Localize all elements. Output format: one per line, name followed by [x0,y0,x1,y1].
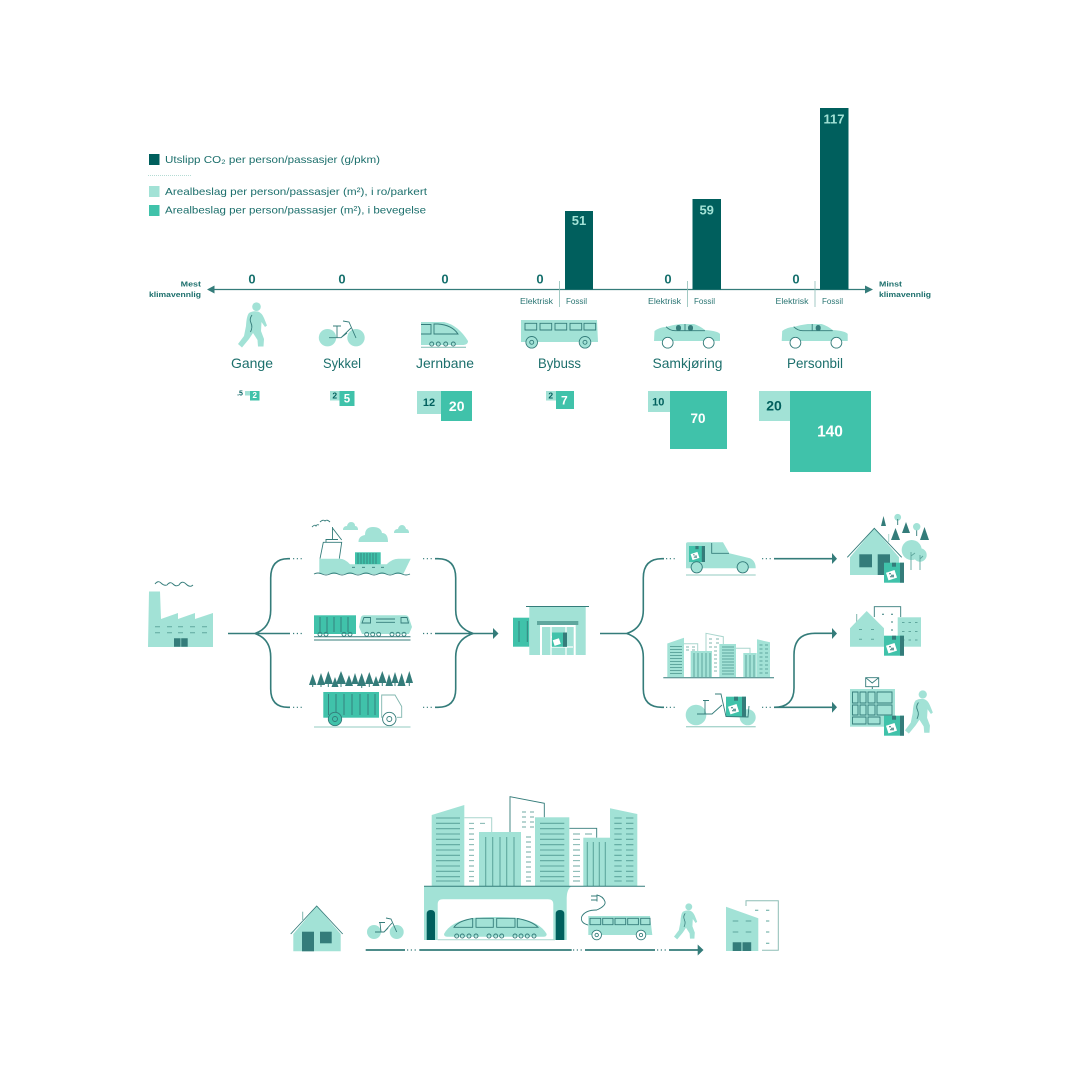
transport mode names: Bybuss [538,355,581,371]
transport mode names [231,355,843,371]
icon: private car [782,324,848,348]
icon: factory [148,582,213,647]
zero emission values: 0 [441,272,449,286]
icon: freight train [314,615,412,640]
axis label: most friendly: klimavennlig [149,290,201,299]
legend: Utslipp CO₂ per person/passasjer (g/pkm) [165,154,380,166]
area squares: car: 140 [817,424,843,440]
zero emission values: 0 [536,272,544,286]
area squares: bicycle: 2 [332,390,337,400]
panel: freight logistics flow [148,514,933,736]
electric / fossil sublabels: Elektrisk [648,297,682,306]
area squares: walking [237,391,260,400]
emission bar: bus fossil 51: 51 [572,213,586,228]
icon: timber truck [314,692,410,727]
area squares: car: 20 [766,398,782,414]
area squares: rail [417,391,472,421]
area squares: rail: 20 [449,398,465,414]
electric / fossil sublabels: Elektrisk [520,297,554,306]
legend [148,154,427,216]
transport mode names: Gange [231,355,273,371]
axis arrow: most to least climate friendly [207,286,873,294]
area squares: bus: 2 [548,390,553,400]
icon: cargo bike [686,694,756,727]
electric / fossil sublabels: Fossil [694,297,715,306]
axis label: most friendly [149,280,202,299]
axis label: least friendly: Minst [879,280,903,288]
icon: parcel lockers with person [850,678,933,736]
icon: delivery van [686,542,756,575]
axis label: least friendly: klimavennlig [879,290,931,299]
icon: walking person [674,903,697,939]
arrows: cargo bike to destinations [762,628,837,713]
emission bar: bus fossil 51 [565,211,593,290]
arrow: outgoing bracket from factory [228,559,303,707]
emission bar: carpool fossil 59: 59 [699,202,714,218]
icon: house [291,906,343,951]
icon: train [421,322,468,347]
icon: destination buildings [726,901,778,951]
area squares: bus [546,390,574,409]
icon: metro train [444,917,547,938]
legend: Arealbeslag per person/passasjer (m²), i ro/parkert [165,186,427,198]
electric / fossil sublabels: Fossil [822,297,843,306]
transport mode names: Samkjøring [652,355,722,371]
icon: electric bus with plug [581,894,652,940]
area squares: bicycle [330,390,354,406]
icon: container ship [314,527,411,575]
icon: town buildings with parcel [850,607,921,656]
axis label: least friendly [879,280,931,299]
electric / fossil sublabels: Fossil [566,297,587,306]
icon: house with trees and parcel [847,514,929,583]
emission bar: car fossil 117: 117 [824,112,844,126]
icon: bicycle [319,321,365,346]
icon: tree row [309,671,413,688]
area squares: bicycle: 5 [344,394,351,406]
icon: bus [521,320,598,348]
icon: bicycle [367,918,404,939]
arrow: commute route [366,944,704,956]
zero emission values: 0 [664,272,672,286]
icon: carpool car [654,324,720,348]
area squares: car [759,391,871,472]
zero emission values [248,272,800,286]
transport mode names: Personbil [787,355,843,371]
transport mode names: Sykkel [323,355,361,371]
icon: walking person [238,302,267,348]
area squares: bus: 7 [561,394,568,408]
icon: clouds and birds [312,520,409,542]
area squares: carpool: 10 [652,396,664,408]
station building [424,886,645,940]
zero emission values: 0 [338,272,346,286]
electric / fossil sublabels: Elektrisk [776,297,810,306]
area squares: carpool: 70 [690,411,706,426]
legend: Arealbeslag per person/passasjer (m²), i bevegelse [165,204,426,216]
zero emission values: 0 [792,272,800,286]
zero emission values: 0 [248,272,256,286]
emission bar: car fossil 117 [820,108,848,290]
city block on station [432,797,637,886]
area squares: walking: .5 [237,391,243,398]
icon: warehouse [513,606,589,655]
area squares: walking: 2 [252,391,257,400]
area squares: rail: 12 [423,397,435,409]
arrow: bracket out of warehouse [600,559,676,707]
area squares: carpool [648,391,727,449]
axis label: most friendly: Mest [181,280,202,288]
electric / fossil sublabels [520,281,843,307]
emission bar: carpool fossil 59 [692,199,721,290]
transport mode names: Jernbane [416,355,474,371]
panel: climate and area chart [148,108,931,472]
arrow: bracket into warehouse [423,559,498,707]
panel: multimodal city commute [291,797,778,956]
icon: city skyline [663,633,774,678]
arrow: van to house [762,553,837,564]
